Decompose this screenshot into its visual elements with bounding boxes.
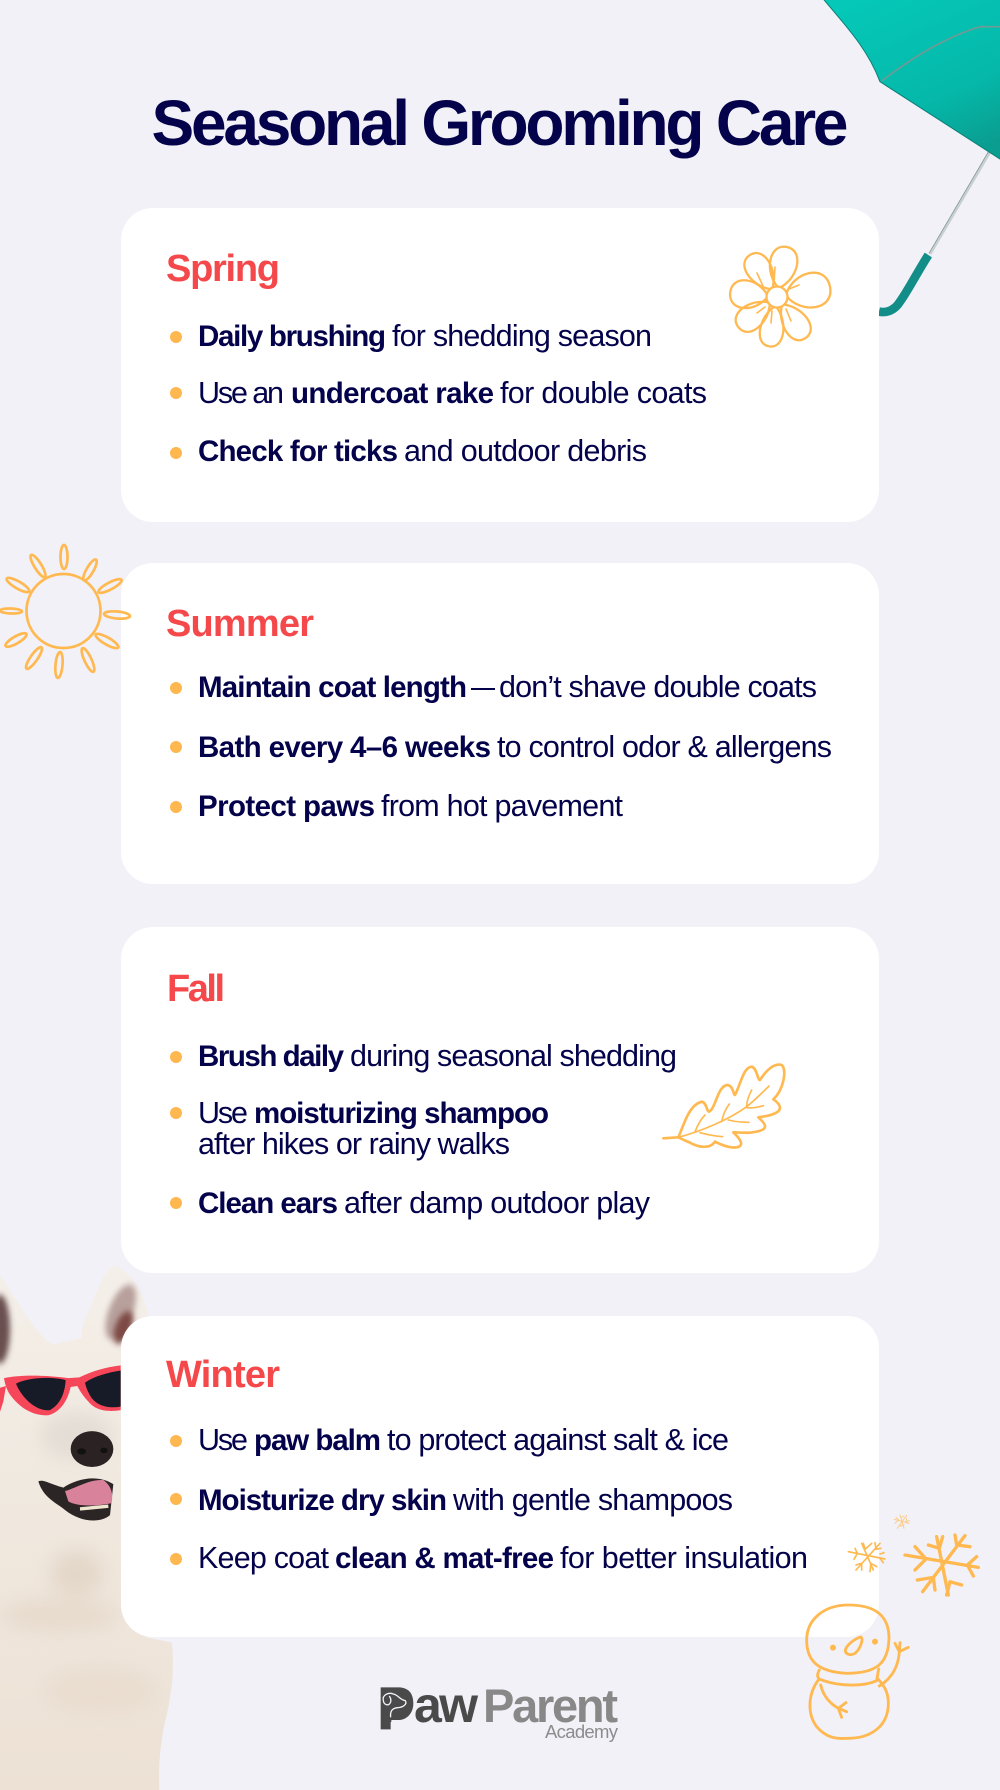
item: clean ears: Clean ears (198, 1187, 338, 1220)
panel: fall (121, 927, 879, 1273)
heading: fall: Fall (167, 968, 225, 1010)
item: moisturize: with gentle shampoos (452, 1483, 733, 1517)
item: check for ticks: and outdoor debris (404, 434, 647, 468)
item: daily brushing: for shedding season (392, 319, 652, 353)
panel: spring (121, 208, 879, 522)
panel: summer (121, 563, 879, 884)
item: paw balm (170, 1423, 729, 1457)
item: clean coat: Keep coat (198, 1541, 330, 1575)
item: bath: Bath every 4–6 weeks (198, 731, 491, 764)
item: moisturizing shampoo (170, 1096, 549, 1161)
item: moisturizing shampoo: Use (198, 1096, 248, 1130)
item: clean coat (170, 1541, 808, 1575)
item: moisturizing shampoo: moisturizing shampoo (254, 1097, 549, 1130)
umbrella (823, 0, 1000, 312)
item: clean ears (170, 1186, 651, 1220)
icon: snowman (807, 1605, 908, 1739)
logo (381, 1677, 619, 1742)
item: protect paws: Protect paws (198, 790, 375, 823)
icon: small snowflake (894, 1515, 909, 1528)
item: undercoat rake: for double coats (500, 376, 707, 410)
item: undercoat rake (170, 376, 707, 410)
logo: Parent (483, 1679, 618, 1732)
item: protect paws: from hot pavement (381, 789, 624, 823)
item: coat length: don’t shave double coats (499, 670, 817, 704)
item: coat length (170, 670, 817, 704)
item: brush daily: during seasonal shedding (350, 1039, 677, 1073)
icon: flower (729, 244, 833, 348)
item: coat length: Maintain coat length (198, 671, 467, 704)
item: clean coat: clean & mat-free (335, 1542, 554, 1575)
item: bath: to control odor & allergens (497, 730, 832, 764)
icon: snowman and snowflakes (807, 1515, 978, 1739)
heading: summer: Summer (166, 603, 314, 645)
logo: P (381, 1679, 414, 1733)
heading: winter: Winter (166, 1354, 280, 1396)
item: protect paws (170, 789, 624, 823)
icon: sun (0, 545, 130, 678)
title: Seasonal Grooming Care (152, 87, 848, 159)
item: paw balm: Use (198, 1423, 248, 1457)
icon: large snowflake (905, 1535, 978, 1595)
item: coat length: — (471, 670, 495, 704)
heading: spring: Spring (166, 248, 280, 290)
item: bath (170, 730, 832, 764)
panel: winter (121, 1316, 879, 1637)
item: brush daily: Brush daily (198, 1040, 345, 1073)
item: clean coat: for better insulation (560, 1541, 808, 1575)
item: check for ticks (170, 434, 647, 468)
item: paw balm: paw balm (254, 1424, 381, 1457)
logo: aw (414, 1677, 478, 1733)
dog with sunglasses (0, 1265, 200, 1790)
item: daily brushing (170, 319, 652, 353)
item: moisturize (170, 1483, 733, 1517)
item: check for ticks: Check for ticks (198, 435, 398, 468)
item: undercoat rake: undercoat rake (291, 377, 494, 410)
item: undercoat rake: Use an (198, 376, 284, 410)
icon: medium snowflake (848, 1543, 885, 1572)
item: daily brushing: Daily brushing (198, 320, 386, 353)
logo: Academy (545, 1721, 619, 1742)
item: moisturizing shampoo: after hikes or rainy walks (198, 1127, 510, 1161)
item: paw balm: to protect against salt & ice (387, 1423, 729, 1457)
item: moisturize: Moisturize dry skin (198, 1484, 447, 1517)
item: clean ears: after damp outdoor play (344, 1186, 651, 1220)
icon: leaf (663, 1065, 784, 1148)
item: brush daily (170, 1039, 677, 1073)
